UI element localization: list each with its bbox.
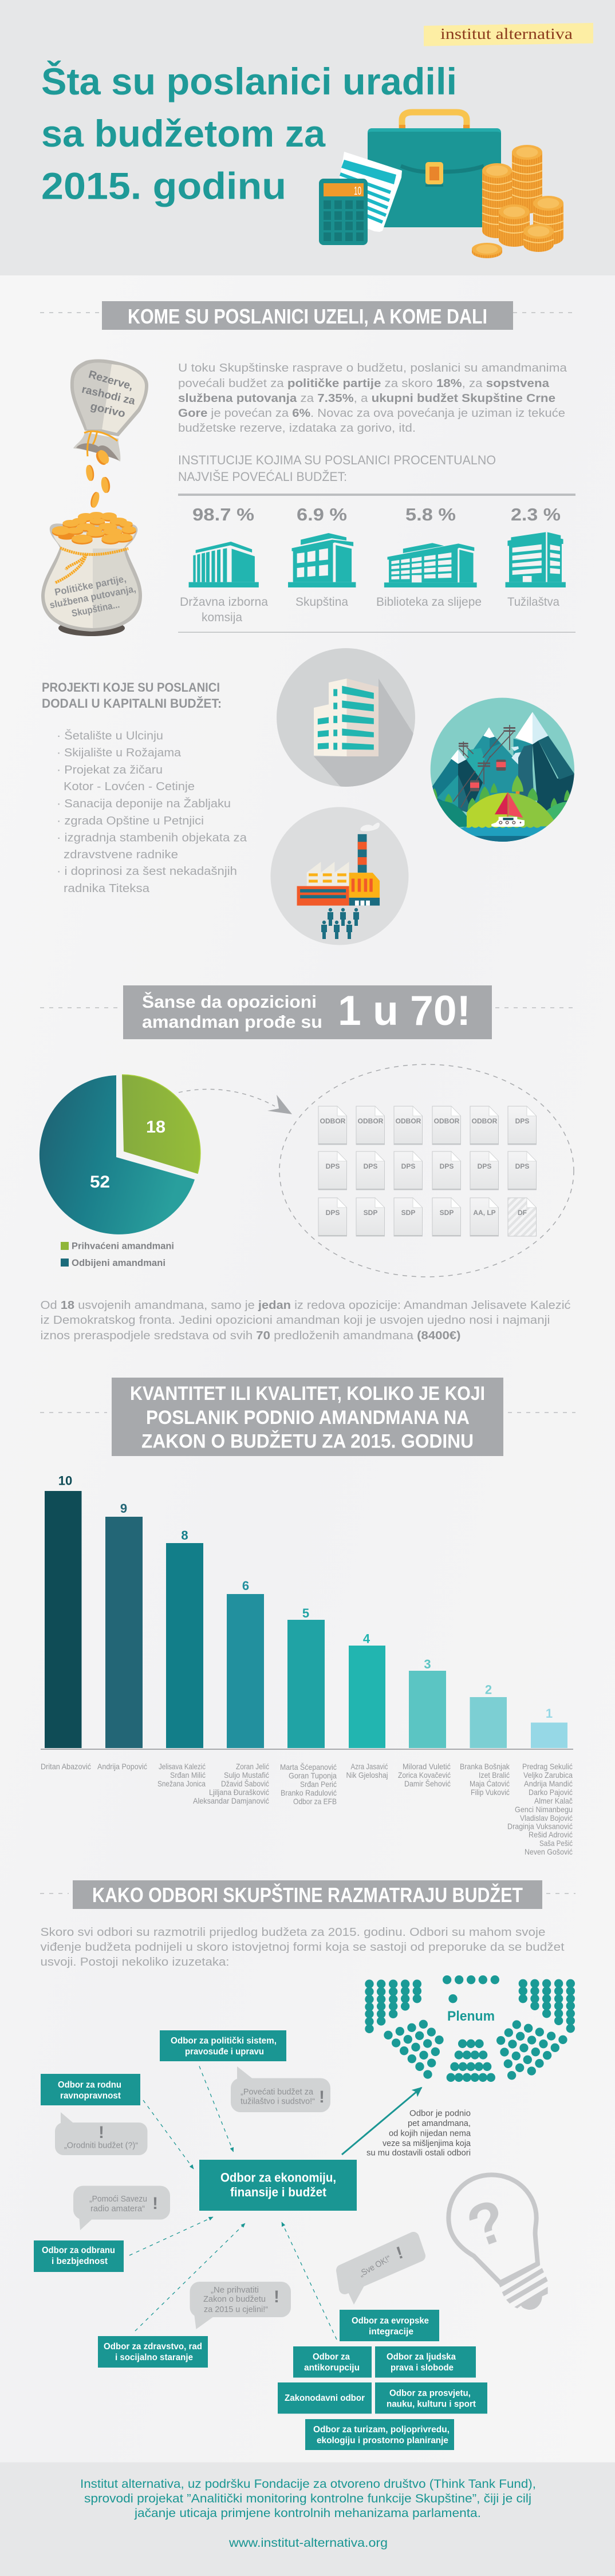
callout: povecati budzet [231,2066,330,2112]
list: projects: · Projekat za žičaru [57,764,163,776]
document row 2: DPS [364,1162,377,1170]
document row 3: DF [518,1209,527,1217]
legend: Odbijeni amandmani [72,1257,165,1268]
callout: pomoci savezu: ! [152,2194,158,2213]
document row 1: ODBOR [320,1117,346,1125]
heading: sanse: 1 u 70! [338,988,471,1034]
document row 2: DPS [478,1162,491,1170]
icon: briefcase [368,112,501,227]
box: main committee [199,2160,357,2211]
label: sack bottom text: Skupština... [70,599,120,619]
icon: falling coins [85,448,111,508]
label: sack bottom text: Političke partije, [54,573,127,598]
heading: projekti: DODALI U KAPITALNI BUDŽET: [42,696,222,711]
chart: pie of amendments: 18 [146,1118,165,1137]
text block: footer credit [80,2478,536,2520]
values: 8 [181,1528,188,1543]
document row 3: AA, LP [473,1209,496,1217]
bars [45,1491,567,1748]
values: 9 [120,1501,127,1516]
values: 5 [302,1606,309,1620]
top seats [443,1975,499,2003]
heading: sanse: amandman prođe su [142,1012,322,1032]
values: 98.7 % [192,504,254,524]
building 2 [288,533,356,587]
document row 1: ODBOR [358,1117,384,1125]
values: 4 [363,1632,370,1646]
document row 3: SDP [364,1209,377,1217]
box: ljudska prava: prava i slobode [391,2363,454,2373]
names: Džavid Šabović [221,1779,269,1788]
box: main committee: finansije i budžet [230,2185,327,2199]
document row 1: DPS [515,1117,529,1125]
names: Predrag Sekulić [522,1762,573,1771]
icon: workers [321,908,359,939]
box: rodna ravnopravnost: ravnopravnost [60,2091,121,2101]
callout: povecati budzet: „Povećati budžet za [241,2087,314,2097]
box: turizam: ekologiju i prostorno planiranje [317,2436,448,2445]
arrow: odbrana to main [129,2217,213,2255]
document row 2: DPS [440,1162,454,1170]
title: Šta su poslanici uradili [41,60,457,102]
heading: kvantitet ili kvalitet: ZAKON O BUDŽETU ZA 2015. GODINU [141,1430,474,1452]
document row 2: DPS [326,1162,340,1170]
heading: kome su poslanici uzeli [40,301,575,330]
legend [61,1240,174,1268]
text block: plenum note: od kojih nijedan nema [389,2129,471,2138]
labels: institutions: komsija [202,611,242,624]
box: ljudska prava [375,2346,476,2377]
box: evropske integracije: integracije [369,2327,413,2337]
box: odbrana: i bezbjednost [52,2257,108,2266]
heading: sanse: Šanse da opozicioni [142,991,317,1012]
text block: committees intro: usvoji. Postoji nekoliko izuzetaka: [40,1956,229,1969]
subheading: institucije [178,453,496,484]
title: sa budžetom za [41,112,326,155]
text block: plenum note: pet amandmana, [408,2119,471,2128]
arrow: rodna ravnopravnost to main [143,2100,194,2169]
labels: institutions: Skupština [295,595,348,609]
names: Dritan Abazović [41,1762,91,1771]
box: evropske integracije: Odbor za evropske [352,2316,429,2326]
names: Veljko Zarubica [523,1770,573,1780]
names: Azra Jasavić [350,1762,388,1771]
callout: povecati budzet: tužilaštvo i sudstvo!“ [241,2097,315,2106]
box: politicki sistem: Odbor za politički sistem, [171,2036,277,2046]
names: Snežana Jonica [157,1779,206,1788]
values: 6.9 % [297,504,347,524]
left seats [365,1979,421,2033]
labels: institutions: Tužilaštva [507,595,559,609]
callout: sve ok: ! [394,2243,405,2263]
box: prosvjeta: Odbor za prosvjetu, [389,2389,471,2398]
document row 3: DPS [326,1209,340,1217]
heading: kvantitet ili kvalitet: POSLANIK PODNIO AMANDMANA NA [146,1407,470,1429]
text block: committees intro: viđenje budžeta podnijeli u skoro istovjetnoj formi koja se sastoji od preporuke da se budžet [40,1941,565,1954]
names: Rešid Adrović [529,1830,573,1839]
title [41,60,457,207]
icon: pouring sack [70,359,148,461]
callout: orodniti budzet: ! [98,2123,104,2142]
text block: budget intro [178,362,567,435]
box: prosvjeta [375,2382,487,2414]
names: Genci Nimanbegu [515,1805,573,1814]
subheading: institucije: NAJVIŠE POVEĆALI BUDŽET: [178,470,347,484]
icon: calculator [319,179,368,245]
box: antikorupcija [293,2346,372,2377]
box: zdravstvo: Odbor za zdravstvo, rad [104,2342,202,2352]
panel: header [0,0,615,275]
names: Almer Kalač [534,1796,573,1805]
icon: mountains circle [431,697,574,842]
center seats [447,2040,495,2082]
names: Aleksandar Damjanović [193,1796,269,1805]
callout: pomoci savezu [73,2186,170,2230]
list: projects: · zgrada Opštine u Petnjici [57,815,204,827]
text block: footer credit: sprovodi projekat ”Analitički monitoring kontrolne funkcije Skupštine”, čiji je cilj [84,2492,531,2506]
panel: plenum seats [365,1975,575,2082]
logo: institut alternativa [424,23,593,46]
text block: budget intro: službena putovanja za 7.35% , a ukupni budžet Skupštine Crne [178,392,555,405]
callout: ne prihvatiti [190,2282,291,2329]
list: projects: · Sanacija deponije na Žabljaku [57,797,231,810]
names: Izet Bralić [479,1770,510,1780]
labels: institutions: Biblioteka za slijepe [376,595,482,609]
list: projects: · Skijalište u Rožajama [57,747,182,759]
heading: kvantitet ili kvalitet: KVANTITET ILI KVALITET, KOLIKO JE KOJI [130,1383,485,1405]
icon: light bulb: ? [459,2186,515,2261]
text block: committees intro [40,1926,565,1969]
link: website: www.institut-alternativa.org [228,2536,388,2550]
text block: budget intro: budžetske rezerve, izdataka za gorivo, itd. [178,422,416,435]
list: projects [57,729,247,895]
box: antikorupcija: antikorupciju [304,2363,360,2373]
heading: kvantitet ili kvalitet [40,1378,575,1456]
names: Marta Šćepanović [280,1762,337,1772]
names: Srđan Milić [170,1770,206,1780]
icon: light bulb [448,2175,548,2310]
label: sack top text: Rezerve, [87,369,135,393]
box: politicki sistem: pravosuđe i upravu [185,2047,264,2057]
box: rodna ravnopravnost: Odbor za rodnu [58,2080,121,2090]
names: Maja Ćatović [470,1779,510,1788]
names: Zoran Jelić [236,1762,269,1771]
list: projects: · i doprinosi za šest nekadašnjih [57,865,237,878]
document row 3: SDP [401,1209,415,1217]
icon: full sack [41,512,142,636]
names: Darko Pajović [529,1788,573,1797]
text block: budget intro: U toku Skupštinske rasprave o budžetu, poslanici su amandmanima [178,362,567,374]
text block: plenum note: su mu dostavili ostali odbori [366,2148,471,2157]
values: 5.8 % [405,504,456,524]
list: projects: radnika Titeksa [64,882,150,895]
document row 2: DPS [401,1162,415,1170]
box: prosvjeta: nauku, kulturu i sport [387,2399,476,2409]
heading: projekti [42,680,222,711]
arrow: evropske integracije to main [282,2222,337,2340]
values: 1 [546,1706,553,1721]
panel: footer [0,2462,615,2576]
values [192,504,561,524]
arrow: pie to documents [179,1089,292,1114]
box: evropske integracije [340,2310,439,2341]
box: odbrana [34,2240,124,2272]
callout: pomoci savezu: radio amatera“ [90,2204,145,2214]
label: sack bottom text [49,573,137,619]
heading: sanse [40,985,575,1039]
box: odbrana: Odbor za odbranu [42,2246,115,2255]
icon: calculator: 10 [354,185,361,198]
subheading: institucije: INSTITUCIJE KOJIMA SU POSLANICI PROCENTUALNO [178,453,496,467]
heading: projekti: PROJEKTI KOJE SU POSLANICI [42,680,220,695]
box: zdravstvo: i socijalno staranje [115,2353,193,2362]
text block: opposition amendment [40,1299,570,1342]
box: politicki sistem [160,2030,286,2061]
callout: ne prihvatiti: za 2015 u cjelini!“ [204,2305,268,2314]
callout: sve ok [342,2238,420,2305]
box: antikorupcija: Odbor za [313,2352,350,2362]
lower left seats [384,2020,444,2079]
right seats [519,1979,575,2033]
names: Milorad Vuletić [403,1762,451,1771]
names: Andrija Popović [97,1762,147,1771]
document row 1: ODBOR [396,1117,421,1125]
legend: Prihvaćeni amandmani [72,1240,174,1252]
text block: plenum note [366,2108,471,2157]
label: sack top text [81,369,136,420]
list: projects: · Šetalište u Ulcinju [57,729,163,742]
building 1 [189,542,259,587]
names: Draginja Vuksanović [507,1822,573,1831]
names [41,1762,573,1856]
box: turizam [305,2419,454,2450]
icon: apartment building circle [277,648,415,787]
building 3 [384,543,477,587]
callout: orodniti budzet [55,2112,148,2155]
callout: orodniti budzet: „Orodniti budžet (?)“ [64,2140,138,2151]
names: Saša Pešić [539,1839,573,1848]
label: plenum: Plenum [447,2009,495,2024]
text block: plenum note: veze sa mišljenjima koja [383,2139,471,2148]
document row 1: ODBOR [472,1117,498,1125]
logo: institut alternativa: institut alternativa [440,25,573,42]
names: Branka Bošnjak [460,1762,510,1771]
chart: pie of amendments: 52 [90,1173,110,1192]
building 4 [506,532,566,587]
chart: institutions percent [178,494,575,633]
names: Odbor za EFB [293,1797,337,1806]
text block: budget intro: povećali budžet za političke partije za skoro 18%, za sopstvena [178,377,550,390]
names: Neven Gošović [525,1847,573,1856]
arrow: zdravstvo to main [135,2223,245,2331]
list: projects: zdravstvene radnike [64,849,178,861]
names: Damir Šehović [404,1779,451,1788]
label: sack bottom text: službena putovanja, [49,583,137,611]
arrow: main to plenum [342,2088,421,2155]
box: turizam: Odbor za turizam, poljoprivredu, [313,2425,450,2435]
panel: accepted amendments dashed ellipse [279,1064,574,1277]
document row 1 [318,1106,536,1145]
arrow: politicki sistem to main [199,2066,234,2152]
callout: povecati budzet: ! [319,2088,325,2106]
names: Srđan Perić [300,1780,337,1789]
text block: committees intro: Skoro svi odbori su razmotrili prijedlog budžeta za 2015. godinu. Odbori su mahom svoje [40,1926,545,1939]
names: Vladislav Bojović [520,1813,573,1822]
text block: footer credit: jačanje uticaja primjene kontrolnih mehanizama parlamenta. [134,2507,481,2520]
box: rodna ravnopravnost [41,2074,140,2105]
coins in sack [52,514,136,545]
list: projects: Kotor - Lovćen - Cetinje [64,780,195,793]
text block: budget intro: Gore je povećan za 6%. Novac za ova povećanja je uziman iz tekuće [178,407,565,420]
labels: institutions: Državna izborna [180,595,268,609]
document row 1: ODBOR [434,1117,460,1125]
icon: coin stacks [472,145,563,258]
text block: footer credit: Institut alternativa, uz podršku Fondacije za otvoreno društvo (Think Tank Fund), [80,2478,536,2491]
box: ljudska prava: Odbor za ljudska [387,2352,456,2362]
label: sack top text: gorivo [89,400,127,420]
values: 10 [58,1474,72,1488]
chart: pie of amendments [40,1075,200,1234]
document row 3 [318,1198,536,1237]
labels: institutions [180,595,559,624]
text block: opposition amendment: iznos preraspodjele sredstava od svih 70 predloženih amandmana (8400€) [40,1330,460,1342]
names: Branko Radulović [281,1788,337,1797]
chart: amendments per MP [41,1474,573,1856]
callout: ne prihvatiti: „Ne prihvatiti [211,2285,259,2295]
values [58,1474,553,1721]
names: Filip Vuković [471,1788,510,1797]
values: 6 [242,1579,249,1593]
box: zakonodavni [278,2382,372,2414]
names: Goran Tuponja [289,1771,337,1780]
names: Zorica Kovačević [398,1770,451,1780]
names: Suljo Mustafić [224,1770,269,1780]
text block: plenum note: Odbor je podnio [409,2108,471,2119]
lower right seats [496,2020,567,2080]
names: Ljiljana Đurašković [209,1788,269,1797]
text block: opposition amendment: iz Demokratskog fronta. Jedini opozicioni amandman koji je usvojen ujedno nosi i najmanji [40,1314,550,1327]
document row 2: DPS [515,1162,529,1170]
text block: opposition amendment: Od 18 usvojenih amandmana, samo je jedan iz redova opozicije: Amandman Jelisavete Kalezić [40,1299,570,1312]
label: sack top text: rashodi za [81,384,136,408]
icons: buildings [189,532,566,587]
names: Andrija Mandić [524,1779,573,1788]
heading: kako odbori: KAKO ODBORI SKUPŠTINE RAZMATRAJU BUDŽET [92,1883,523,1907]
coin tops [52,512,136,543]
names: Jelisava Kalezić [159,1762,206,1771]
icon: paper with lines [333,152,402,232]
values: 2 [485,1682,492,1697]
values: 2.3 % [511,504,561,524]
box: zdravstvo [98,2336,208,2368]
callout: ne prihvatiti: ! [274,2287,279,2306]
document row 2 [318,1151,536,1190]
values: 3 [424,1657,431,1671]
document row 3: SDP [440,1209,454,1217]
icon: factory circle [270,807,409,945]
callout: sve ok: „Sve OK!“ [357,2254,393,2279]
callout: ne prihvatiti: Zakon o budžetu [203,2294,266,2304]
callout: pomoci savezu: „Pomoći Savezu [89,2194,147,2204]
box: zakonodavni: Zakonodavni odbor [285,2393,365,2403]
heading: kome su poslanici uzeli: KOME SU POSLANICI UZELI, A KOME DALI [128,305,487,328]
list: projects: · izgradnja stambenih objekata za [57,831,247,844]
title: 2015. godinu [41,165,286,207]
names: Nik Gjeloshaj [346,1770,388,1780]
box: main committee: Odbor za ekonomiju, [220,2170,336,2185]
